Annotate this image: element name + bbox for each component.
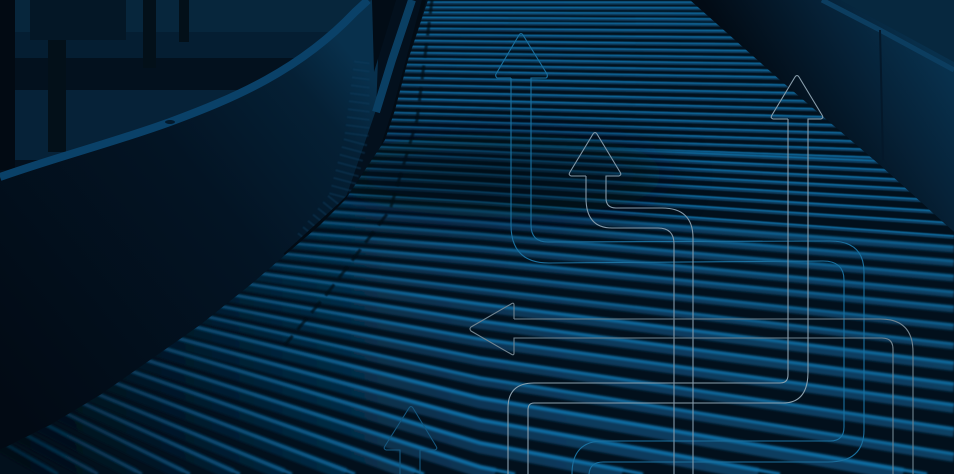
arrow: grey left arrow routed right then down xyxy=(470,303,913,474)
dark seam across the rollers xyxy=(285,0,432,345)
inner rail and dark post xyxy=(285,0,424,255)
arrow: grey up arrow routed down and left xyxy=(508,76,823,474)
arrow: dim teal up arrow routed right then down xyxy=(496,34,864,474)
shaded patch on the rollers xyxy=(330,133,670,217)
arrow: wavy grey up arrow running down to the bottom edge xyxy=(569,132,693,474)
curved side wall of the conveyor xyxy=(0,0,378,450)
arrow: dim up arrow at the bottom edge xyxy=(384,406,437,474)
right side wall with rim xyxy=(690,0,954,232)
